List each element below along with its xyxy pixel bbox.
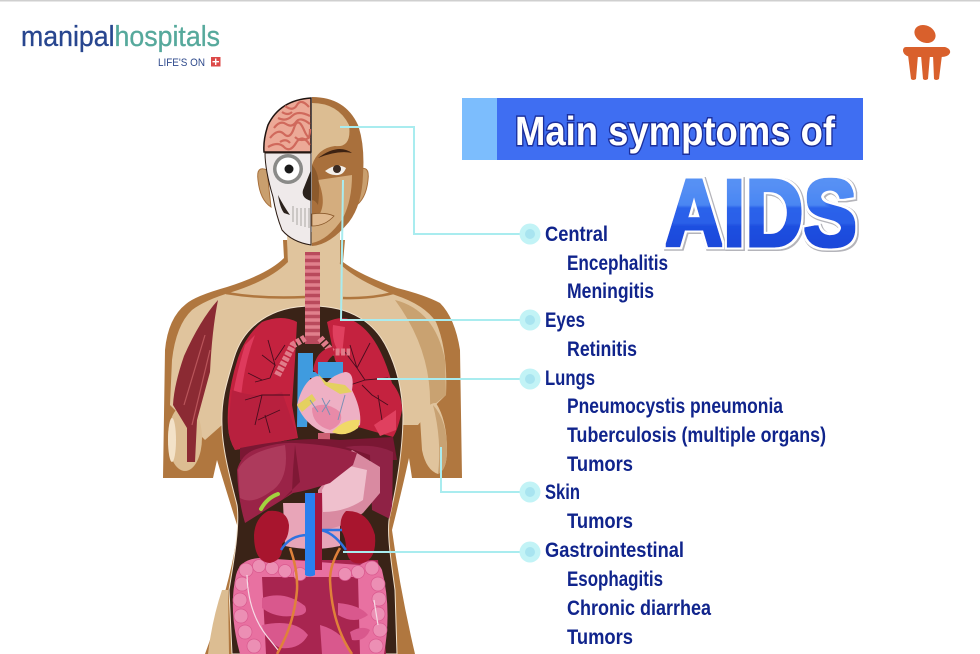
- eyes group: Eyes: [545, 309, 585, 332]
- skull nose and teeth: [278, 170, 311, 215]
- liver: [237, 443, 357, 523]
- eyebrow: [318, 149, 352, 158]
- gastrointestinal group: Esophagitis: [567, 568, 663, 591]
- gastrointestinal group: Gastrointestinal: [545, 539, 684, 562]
- skull eye: [273, 154, 303, 184]
- lower waist skin: [208, 590, 229, 654]
- title banner: [462, 98, 863, 160]
- ureters: [277, 548, 352, 654]
- title word AIDS: AIDS: [665, 160, 857, 267]
- title banner: Main symptoms of: [515, 108, 835, 154]
- skin group: Skin: [545, 481, 580, 504]
- forearm highlights: [168, 405, 202, 471]
- aorta and vena cava: [315, 493, 322, 570]
- cheek highlight: [312, 175, 352, 243]
- body cavity: [222, 306, 403, 654]
- central group: [545, 223, 668, 303]
- logo: manipal hospitals: [21, 21, 220, 69]
- upper torso and arm skin: [170, 240, 446, 440]
- forehead highlight: [312, 103, 349, 165]
- symptom list: [545, 223, 826, 649]
- central group: Encephalitis: [567, 252, 668, 275]
- left ear and right ear: [258, 168, 368, 207]
- intestines: [233, 558, 388, 654]
- anatomical body figure: [163, 97, 462, 654]
- central group: Central: [545, 223, 608, 246]
- icon: orange pillar logo: [903, 22, 950, 80]
- gastrointestinal group: Chronic diarrhea: [567, 597, 711, 620]
- darker skin band on right arm: [395, 300, 446, 408]
- arm muscle: [173, 300, 218, 462]
- logo: manipal hospitals: manipalhospitals: [21, 21, 220, 53]
- lungs group: Tumors: [567, 453, 633, 476]
- lips: [312, 213, 334, 226]
- skin group: Tumors: [567, 510, 633, 533]
- collarbone shading: [226, 292, 397, 298]
- right eye: [325, 165, 346, 175]
- gallbladder: [261, 494, 278, 509]
- stomach: [318, 450, 380, 530]
- central group: Meningitis: [567, 280, 654, 303]
- lungs group: Pneumocystis pneumonia: [567, 395, 783, 418]
- spleen: [345, 446, 393, 520]
- gastrointestinal group: Tumors: [567, 626, 633, 649]
- nose shade: [312, 165, 319, 205]
- neck: [287, 232, 340, 290]
- right lung: [327, 318, 402, 437]
- brain: [264, 98, 311, 152]
- lungs group: [545, 367, 826, 476]
- head right half: skin: [312, 97, 363, 246]
- logo: manipal hospitals: LIFE'S ON: [158, 57, 205, 69]
- diaphragm band: [240, 437, 397, 460]
- skin group: [545, 481, 633, 533]
- renal vessels: [281, 530, 346, 550]
- pancreas region: [283, 503, 340, 549]
- gastrointestinal group: [545, 539, 711, 649]
- eyes group: [545, 309, 637, 361]
- connector lines: [340, 127, 522, 552]
- left lung: [228, 318, 298, 450]
- lungs group: Lungs: [545, 367, 595, 390]
- kidneys: [254, 511, 289, 563]
- skull: [265, 153, 311, 245]
- body silhouette: [163, 240, 462, 654]
- heart with vessels: [297, 347, 360, 446]
- eyes group: Retinitis: [567, 338, 637, 361]
- lungs group: Tuberculosis (multiple organs): [567, 424, 826, 447]
- bronchi: [277, 338, 350, 376]
- marker dots: [520, 224, 540, 562]
- trachea: [305, 252, 320, 344]
